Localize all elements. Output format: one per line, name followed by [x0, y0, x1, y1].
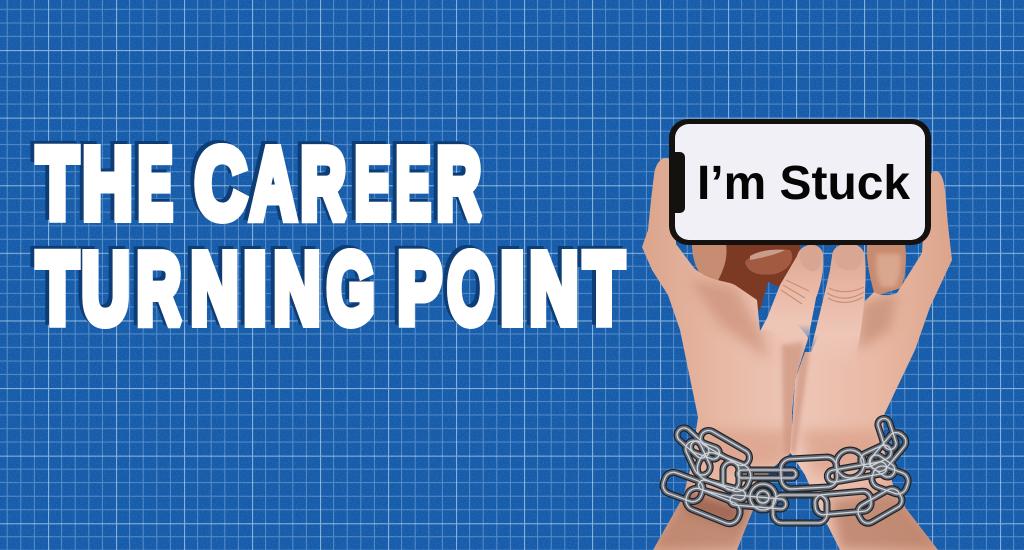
- title: T: [37, 128, 78, 240]
- title: C: [195, 128, 246, 240]
- title: U: [82, 233, 130, 345]
- illustration: chained hands holding phone: [635, 119, 960, 550]
- title: A: [250, 128, 296, 240]
- title: E: [138, 128, 173, 240]
- title: R: [437, 128, 481, 240]
- wrist chains: [660, 417, 911, 527]
- title: N: [191, 233, 239, 345]
- title: R: [301, 128, 346, 240]
- title: N: [530, 233, 578, 345]
- title: I: [500, 233, 525, 345]
- title: I: [243, 233, 266, 345]
- right hand and forearm: [785, 160, 960, 550]
- title: H: [83, 128, 132, 240]
- title: T: [584, 233, 624, 345]
- index finger left hand: [760, 245, 823, 350]
- back fingers behind the phone: [692, 244, 906, 310]
- title: O: [448, 233, 494, 345]
- title: E: [396, 128, 431, 240]
- title: G: [327, 233, 374, 345]
- phone: [669, 119, 931, 245]
- title: E: [355, 128, 391, 240]
- index finger right hand: [808, 243, 866, 365]
- phone notch: [669, 152, 685, 213]
- phone screen text: I’m Stuck: [697, 157, 910, 210]
- title: N: [274, 233, 320, 345]
- left hand and forearm: [635, 150, 810, 550]
- title: T: [37, 233, 78, 345]
- title: P: [398, 233, 442, 345]
- title: R: [137, 233, 181, 345]
